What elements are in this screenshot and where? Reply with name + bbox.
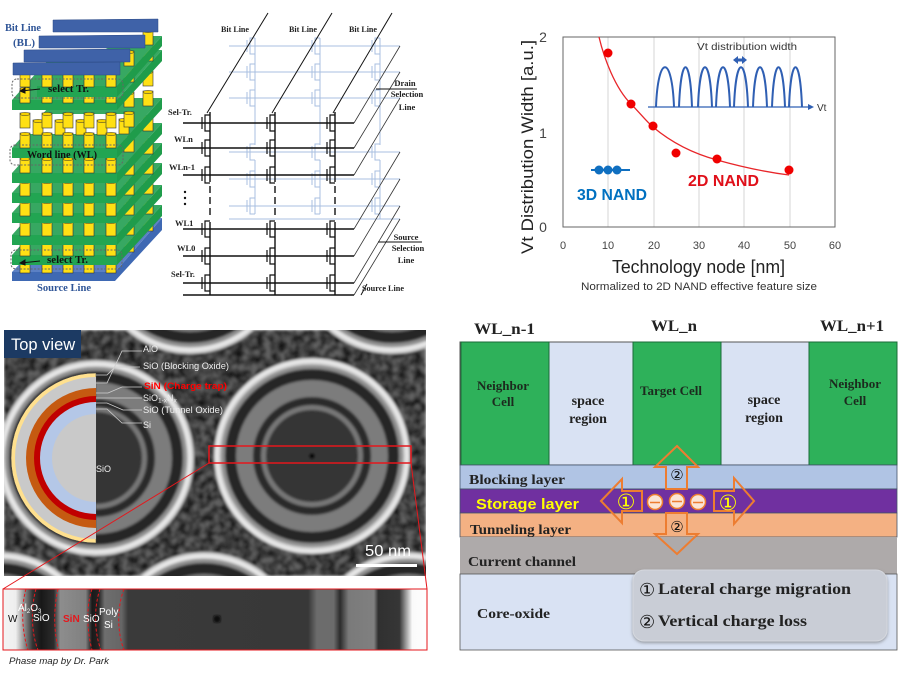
bit lines in black (207, 13, 392, 113)
selection line pointers (361, 89, 422, 295)
orange arrows (601, 446, 754, 554)
top view title: Top view (11, 336, 75, 354)
inset: Vt distribution humps: Vt distribution width (697, 41, 797, 53)
zoomed strip (3, 589, 427, 650)
space region labels (569, 393, 783, 427)
stack labels: select Tr. (47, 254, 88, 266)
vertical ellipsis (184, 191, 186, 205)
zoomed strip: Poly (99, 607, 118, 618)
circuit labels: Line (398, 255, 414, 265)
y axis title: Vt Distribution Width [a.u.] (518, 40, 537, 254)
zoomed strip: SiO (33, 613, 50, 624)
scale bar (356, 543, 417, 567)
layer labels (468, 473, 579, 622)
circuit labels: Sel-Tr. (168, 107, 192, 117)
trapped charges (648, 494, 706, 510)
3D NAND label: 3D NAND (577, 187, 647, 204)
x axis ticks: 20 (648, 240, 660, 252)
layer labels: AlO (143, 344, 158, 354)
cells row (460, 342, 897, 465)
circuit labels: Drain (394, 78, 416, 88)
panel: TEM top view (2, 330, 428, 666)
layer labels (96, 344, 229, 474)
3D NAND data points (591, 166, 630, 174)
stack labels: select Tr. (48, 83, 89, 95)
word line headings: WL_n+1 (820, 318, 884, 335)
space region labels: space (748, 393, 780, 408)
circuit labels: WL1 (175, 218, 193, 228)
x axis ticks: 10 (602, 240, 614, 252)
zoomed strip: O (30, 603, 38, 614)
zoomed strip: SiN (63, 614, 80, 625)
y axis ticks: 0 (539, 219, 547, 235)
2D NAND fit curve (599, 37, 789, 175)
y axis ticks: 1 (539, 125, 547, 141)
legend callout: Vertical charge loss (658, 613, 807, 630)
legend callout (633, 570, 887, 641)
layer labels: SiO (Blocking Oxide) (143, 361, 229, 371)
cell labels (477, 376, 881, 409)
zoomed strip: Si (104, 620, 113, 631)
back plane circuit in blue (229, 38, 400, 219)
x axis ticks: 40 (738, 240, 750, 252)
y axis ticks (539, 29, 547, 235)
circuit labels: Sel-Tr. (171, 269, 195, 279)
layer labels: Si (143, 420, 151, 430)
x axis ticks: 0 (560, 240, 566, 252)
layer labels: Storage layer (476, 496, 579, 513)
circuit labels: Selection (392, 243, 425, 253)
circuit labels: Source (394, 232, 419, 242)
stack labels: Source Line (37, 282, 91, 294)
legend callout: ② (639, 612, 655, 633)
layer labels: Tunneling layer (470, 523, 571, 538)
inset: Vt distribution humps: Vt (817, 103, 827, 114)
x axis ticks (560, 240, 841, 252)
front plane circuit in black (183, 112, 354, 295)
select transistor box top (12, 79, 123, 98)
word line headings: WL_n-1 (474, 321, 535, 338)
y axis ticks: 2 (539, 29, 547, 45)
cell labels: Cell (844, 393, 867, 408)
space region labels: region (745, 411, 783, 426)
layer labels: SiO (143, 393, 158, 403)
2D NAND label: 2D NAND (688, 173, 759, 190)
x axis ticks: 60 (829, 240, 841, 252)
grid lines (608, 37, 790, 227)
stack labels (5, 22, 97, 294)
layer labels: Core-oxide (477, 607, 550, 622)
layer labels: Blocking layer (469, 473, 565, 488)
word line box (10, 145, 123, 165)
panel: circuit diagram (168, 13, 425, 295)
circuit labels: Line (399, 102, 415, 112)
circuit labels: Bit Line (221, 24, 249, 34)
x axis title: Technology node [nm] (612, 257, 785, 277)
migration markers: ① (719, 491, 737, 515)
source line plate (12, 218, 162, 281)
word line headings: WL_n (651, 318, 697, 335)
circuit labels: Source Line (362, 283, 404, 293)
leader lines (96, 351, 142, 423)
stack labels: (BL) (13, 37, 35, 49)
circuit labels: Selection (391, 89, 424, 99)
cell labels: Neighbor (829, 376, 881, 391)
space region labels: region (569, 412, 607, 427)
micrograph background and rings (4, 330, 426, 576)
zoomed strip: Al (18, 603, 27, 614)
inset: Vt distribution humps (648, 41, 827, 114)
select transistor box bottom (11, 250, 122, 269)
layer labels: 1-x (158, 398, 168, 404)
bit lines (13, 19, 158, 75)
migration markers (617, 466, 737, 536)
layer labels: Current channel (468, 555, 576, 570)
circuit labels: WLn-1 (169, 162, 195, 172)
x axis ticks: 30 (693, 240, 705, 252)
cell labels: Target Cell (640, 383, 702, 398)
2D NAND data points (604, 48, 794, 174)
zoomed strip: W (8, 614, 18, 625)
stack labels: Bit Line (5, 22, 41, 34)
layer stack bands (460, 465, 897, 650)
circuit labels: Bit Line (349, 24, 377, 34)
zoomed strip: 3 (38, 609, 42, 615)
space region labels: space (572, 394, 604, 409)
circuit labels (168, 24, 425, 293)
circuit labels: Bit Line (289, 24, 317, 34)
circuit labels: WLn (174, 134, 193, 144)
zoomed strip: 2 (27, 609, 31, 615)
cell labels: Neighbor (477, 378, 529, 393)
plot frame (563, 37, 835, 227)
migration markers: ① (617, 490, 635, 514)
layer labels: SiO (96, 464, 111, 474)
layer labels: x (174, 398, 178, 404)
arrows to select transistors (20, 88, 40, 265)
word line headings (474, 318, 884, 338)
panel: Vt distribution width chart (518, 29, 841, 293)
scale bar: 50 nm (365, 543, 411, 560)
panel: 3D NAND stack structure (5, 19, 162, 294)
panel: charge loss cell schematic (460, 318, 897, 650)
legend callout: ① (639, 580, 655, 601)
stack labels: Word line (WL) (27, 149, 97, 161)
zoom box and lines (3, 446, 427, 589)
layer labels: N (167, 393, 174, 403)
zoomed strip: SiO (83, 614, 100, 625)
legend callout: Lateral charge migration (658, 581, 851, 598)
top view title (4, 330, 81, 358)
circuit labels: WL0 (177, 243, 195, 253)
layer labels: SiN (Charge trap) (144, 381, 227, 391)
migration markers: ② (670, 518, 684, 536)
normalization note: Normalized to 2D NAND effective feature size (581, 281, 817, 293)
migration markers: ② (670, 466, 684, 484)
diagonal connector lines (354, 46, 400, 295)
cell labels: Cell (492, 394, 515, 409)
layer labels: SiO (Tunnel Oxide) (143, 405, 223, 415)
cross-section half disc (11, 373, 96, 543)
x axis ticks: 50 (784, 240, 796, 252)
credit: Phase map by Dr. Park (9, 656, 110, 667)
